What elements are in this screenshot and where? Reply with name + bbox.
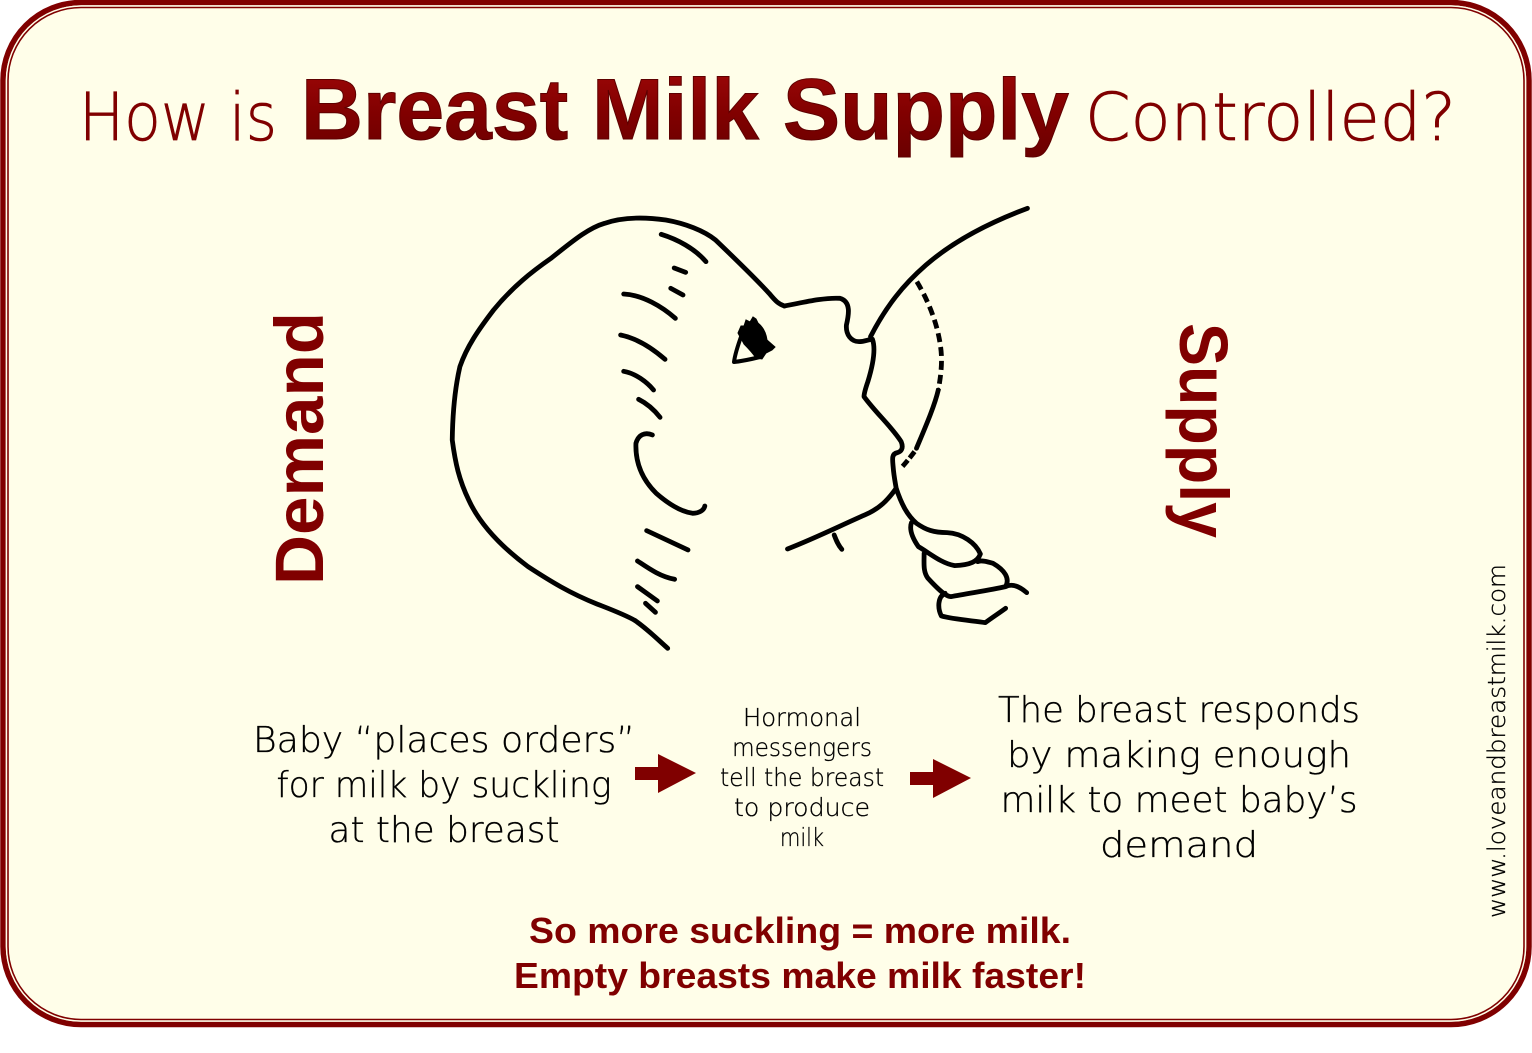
mother's hand bbox=[896, 488, 1027, 623]
hair strokes bbox=[621, 234, 706, 417]
text: breast responds: by making enough bbox=[1007, 735, 1351, 776]
text: hormonal messengers: tell the breast bbox=[720, 763, 884, 792]
text: baby places orders: at the breast bbox=[328, 810, 560, 851]
heading: Demand: Demand bbox=[261, 312, 338, 585]
title: Breast Milk Supply bbox=[301, 62, 1069, 158]
text: breast responds: The breast responds bbox=[998, 690, 1360, 731]
neck crease bbox=[834, 535, 842, 549]
ear bbox=[636, 434, 705, 513]
text: breast responds bbox=[998, 690, 1360, 866]
text: hormonal messengers: messengers bbox=[732, 733, 872, 762]
conclusion text: So more suckling = more milk. bbox=[529, 910, 1071, 951]
website credit: www.loveandbreastmilk.com bbox=[1483, 564, 1511, 918]
illustration: baby breastfeeding bbox=[452, 208, 1027, 648]
text: breast responds: demand bbox=[1100, 825, 1258, 866]
chin and neck bbox=[787, 488, 896, 549]
areola solid line bbox=[916, 390, 938, 448]
conclusion text bbox=[514, 910, 1086, 996]
icon: baby eye bbox=[734, 317, 775, 362]
arrow: demand to hormones bbox=[635, 754, 696, 793]
text: baby places orders: for milk by suckling bbox=[276, 765, 612, 806]
text: breast responds: milk to meet baby’s bbox=[1000, 780, 1358, 821]
areola end dashes bbox=[902, 452, 915, 467]
title: Controlled? bbox=[1085, 79, 1456, 156]
nose and upper lip bbox=[784, 298, 902, 488]
text: baby places orders: Baby “places orders” bbox=[253, 720, 635, 761]
title bbox=[79, 62, 1456, 158]
neck hair strokes bbox=[637, 531, 688, 612]
text: hormonal messengers: milk bbox=[780, 823, 824, 852]
text: hormonal messengers: Hormonal bbox=[743, 703, 861, 732]
heading: Supply: Supply bbox=[1165, 323, 1242, 538]
breast curve bbox=[871, 208, 1027, 337]
arrow: hormones to supply bbox=[910, 759, 971, 798]
head outline bbox=[452, 218, 784, 648]
conclusion text: Empty breasts make milk faster! bbox=[514, 955, 1086, 996]
text: hormonal messengers: to produce bbox=[734, 793, 870, 822]
areola dashed line bbox=[917, 282, 942, 390]
text: baby places orders bbox=[253, 720, 635, 851]
text: hormonal messengers bbox=[720, 703, 884, 852]
title: How is bbox=[79, 79, 277, 156]
